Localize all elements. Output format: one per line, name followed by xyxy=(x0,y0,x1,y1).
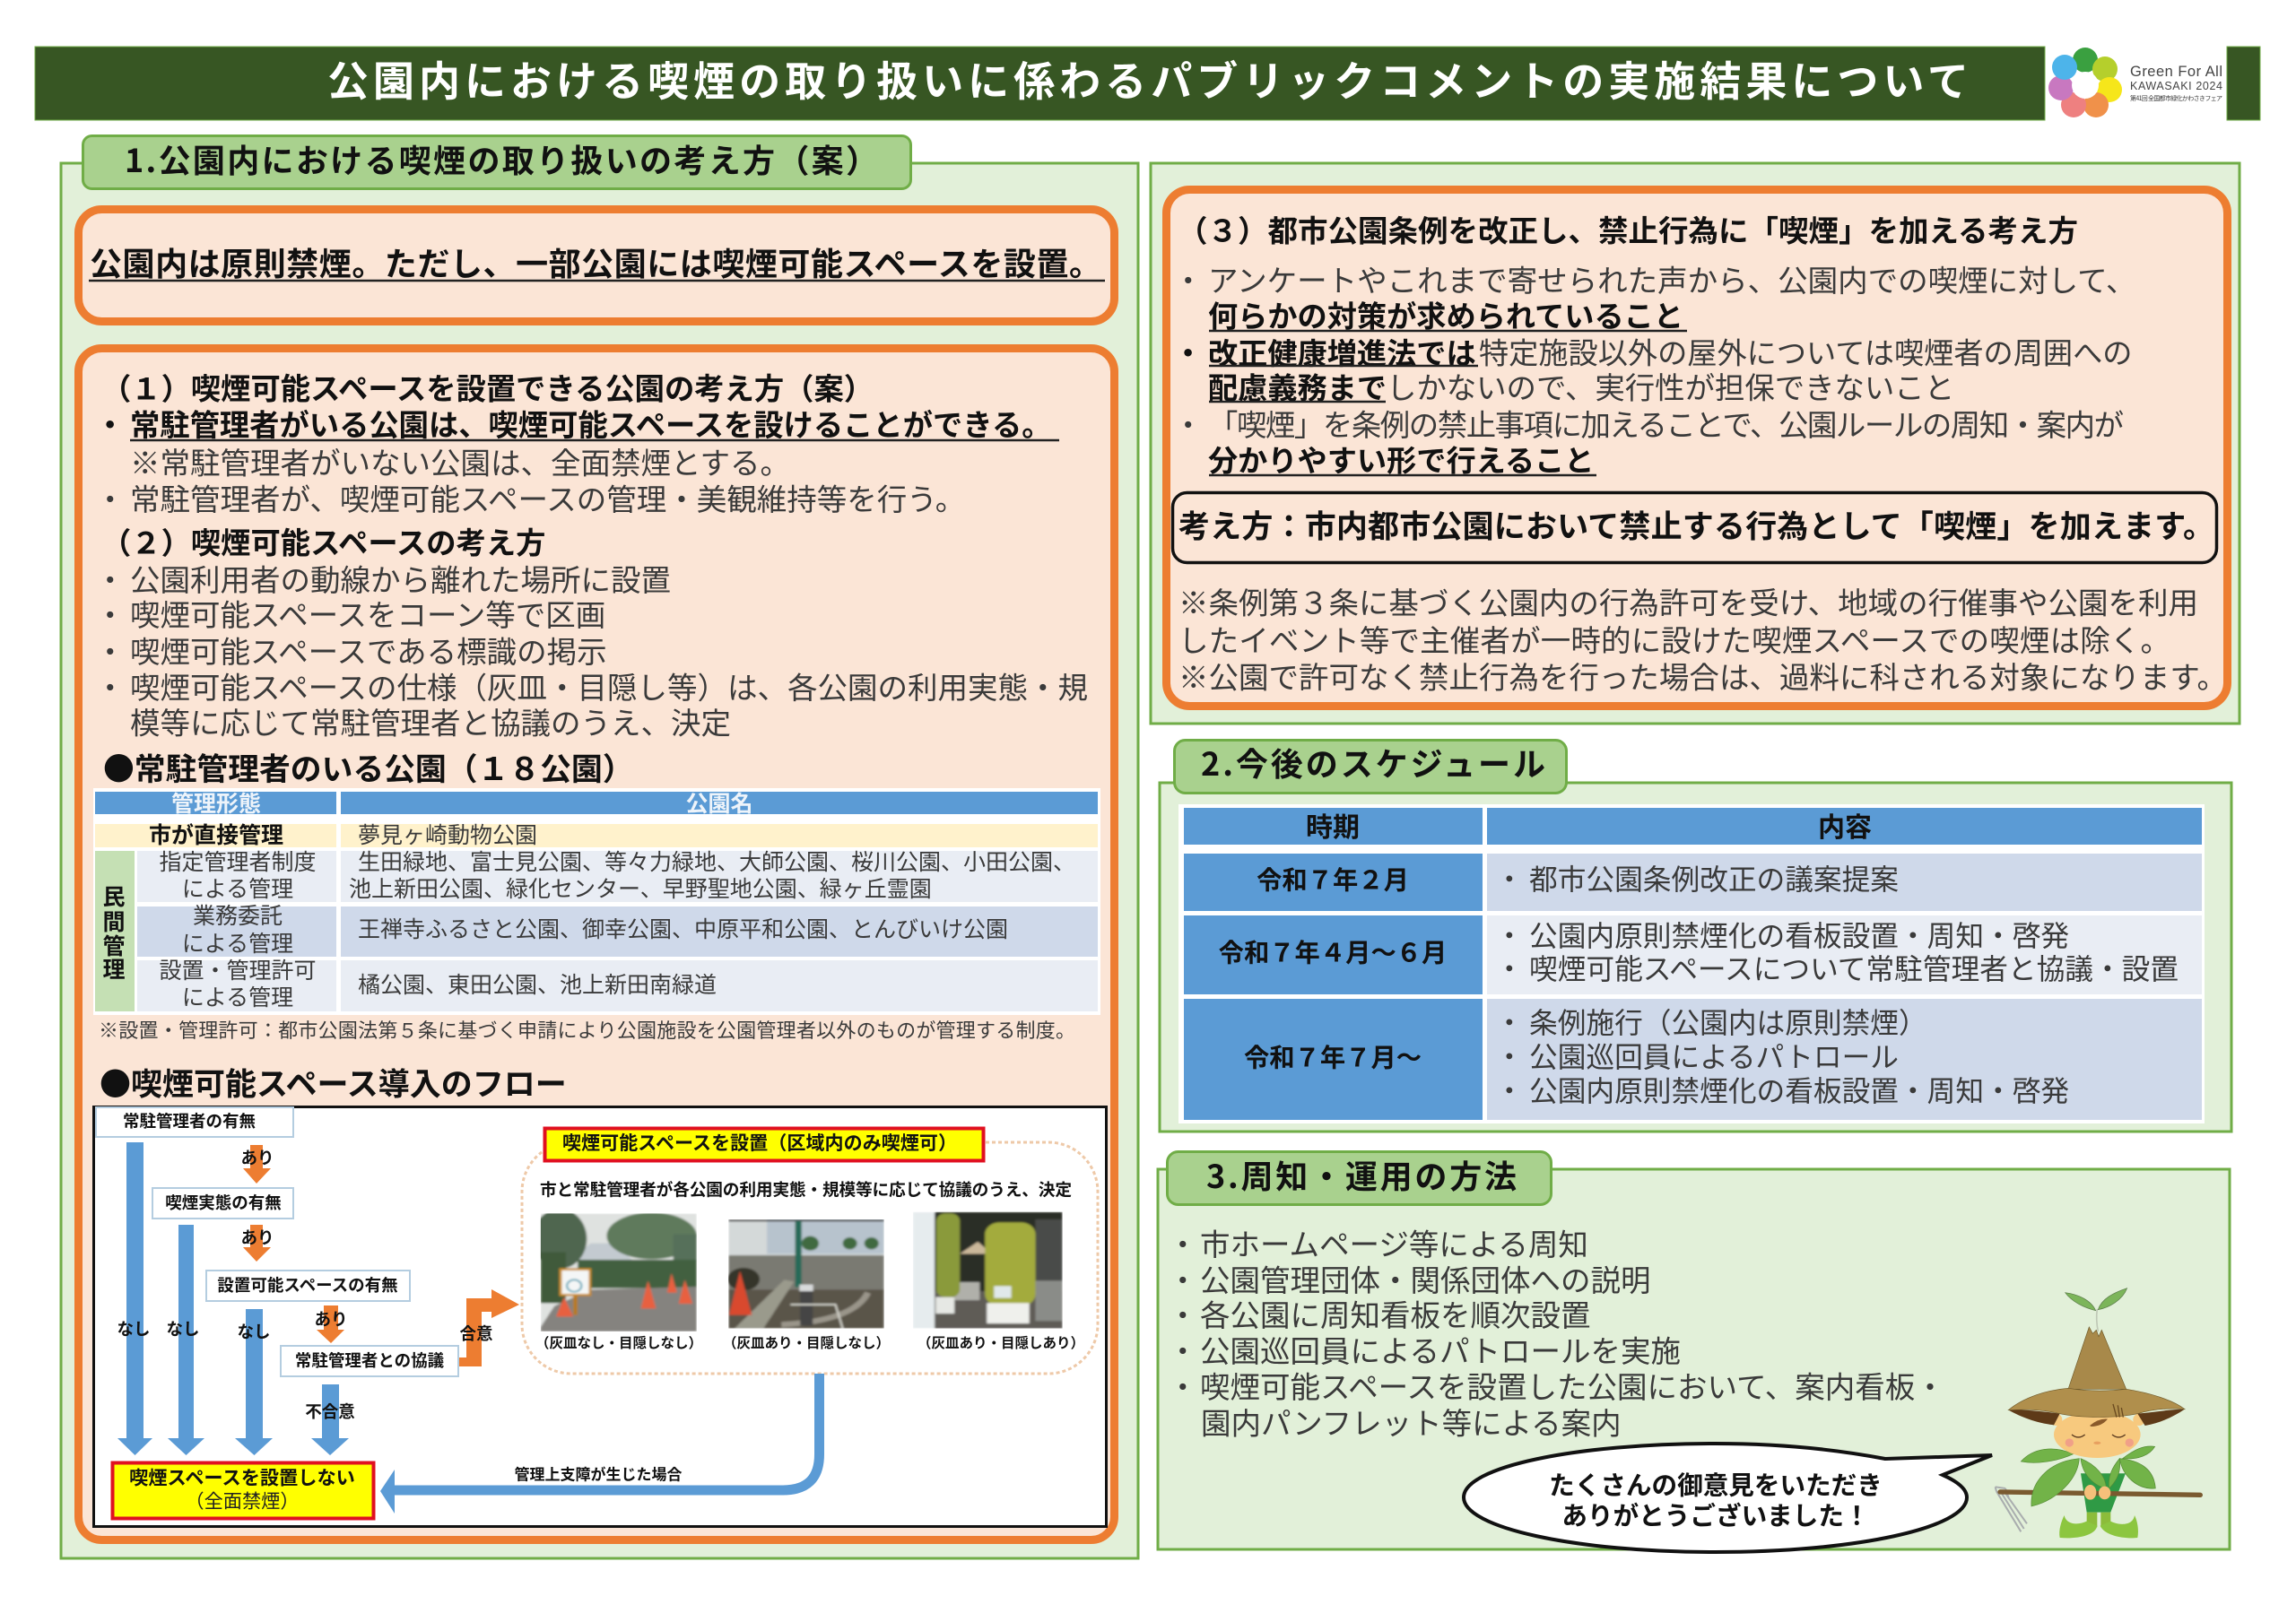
flow steps: 常駐管理者との協議 xyxy=(295,1349,445,1372)
table: parks by management type: 市が直接管理 xyxy=(149,818,283,850)
flow steps: 常駐管理者の有無 xyxy=(123,1109,256,1132)
panel: smoking space policy xyxy=(79,348,1114,1540)
text block: methods: 園内パンフレット等による案内 xyxy=(1201,1399,1622,1444)
schedule table: ・ xyxy=(1495,1069,1524,1110)
heading: parks with resident managers: ●常駐管理者のいる公園（１８公園） xyxy=(103,745,634,790)
text block: policy (2): 喫煙可能スペースである標識の掲示 xyxy=(130,628,607,671)
text block: policy (1): ・ xyxy=(95,400,125,445)
text block: policy (1): （１）喫煙可能スペースを設置できる公園の考え方（案） xyxy=(101,364,874,409)
mascot character xyxy=(1996,1288,2200,1538)
heading: flow: ●喫煙可能スペース導入のフロー xyxy=(100,1060,567,1105)
photo captions xyxy=(535,1332,1084,1352)
blue arrows: none xyxy=(117,1142,349,1455)
rake head xyxy=(1996,1487,2027,1531)
table: parks by management type: 橘公園、東田公園、池上新田南緑道 xyxy=(358,967,717,1000)
hands xyxy=(2084,1485,2110,1500)
rake handle xyxy=(2000,1492,2200,1495)
schedule table xyxy=(1178,804,2205,1123)
logo: Green For All Kawasaki 2024 xyxy=(2048,48,2222,117)
flow labels: 不合意 xyxy=(305,1400,355,1423)
text block: reasons: 改正健康増進法では xyxy=(1208,328,1476,373)
flow labels: なし xyxy=(166,1317,200,1340)
schedule table: 令和７年４月～６月 xyxy=(1219,932,1447,970)
table: parks by management type: 業務委託 xyxy=(193,898,283,931)
photo captions: （灰皿なし・目隠しなし） xyxy=(535,1332,702,1352)
text block: reasons: 何らかの対策が求められていること xyxy=(1208,292,1683,335)
text block: notes: ※条例第３条に基づく公園内の行為許可を受け、地域の行催事や公園を利用 xyxy=(1178,579,2198,622)
flow labels: 管理上支障が生じた場合 xyxy=(515,1462,682,1485)
schedule table: 都市公園条例改正の議案提案 xyxy=(1529,857,1899,898)
schedule table: 公園内原則禁煙化の看板設置・周知・啓発 xyxy=(1529,1069,2069,1110)
table: parks by management type: 池上新田公園、緑化センター、早野聖地公園、緑ヶ丘霊園 xyxy=(349,872,932,904)
callout: stance xyxy=(1173,493,2217,563)
flow labels: なし xyxy=(237,1320,271,1343)
flow chart xyxy=(93,1106,1107,1526)
text block: policy (2): （２）喫煙可能スペースの考え方 xyxy=(101,518,545,563)
flow labels: 合意 xyxy=(459,1322,493,1345)
photo captions: （灰皿あり・目隠しなし） xyxy=(723,1332,890,1352)
flow steps: 喫煙実態の有無 xyxy=(165,1191,282,1214)
hat xyxy=(2008,1327,2185,1426)
speech bubble: たくさんの御意見をいただき xyxy=(1549,1465,1883,1503)
text block: policy (2): ・ xyxy=(95,590,126,635)
text block: policy (2): 喫煙可能スペースの仕様（灰皿・目隠し等）は、各公園の利用実態・規 xyxy=(130,664,1088,707)
table: parks by management type: による管理 xyxy=(182,926,293,958)
section 3 heading tab: 3.周知・運用の方法 xyxy=(1206,1151,1517,1198)
photo captions: （灰皿あり・目隠しあり） xyxy=(918,1332,1084,1352)
schedule table: 条例施行（公園内は原則禁煙） xyxy=(1529,1001,1927,1042)
text block: policy (1): ・ xyxy=(95,475,126,518)
schedule table: 公園巡回員によるパトロール xyxy=(1529,1035,1899,1076)
table: parks by management type: 管理形態 xyxy=(171,786,261,819)
table: parks by management type: 王禅寺ふるさと公園、御幸公園、中原平和公園、とんびいけ公園 xyxy=(358,912,1008,944)
table: parks by management type: 指定管理者制度 xyxy=(159,845,317,877)
text block: reasons: ・ xyxy=(1173,328,1203,373)
dashed group: smoking space options: 喫煙可能スペースを設置（区域内のみ喫煙可） xyxy=(562,1129,957,1156)
text block: reasons xyxy=(1173,256,2135,481)
text block: policy (2): 模等に応じて常駐管理者と協議のうえ、決定 xyxy=(130,699,731,742)
text block: reasons: しかないので、実行性が担保できないこと xyxy=(1387,364,1954,407)
box: no smoking space: 喫煙スペースを設置しない xyxy=(129,1463,355,1490)
table: parks by management type xyxy=(93,786,1100,1015)
speech bubble xyxy=(1464,1444,1992,1552)
arrow: return to no smoking space xyxy=(380,1374,820,1514)
panel: section 1 xyxy=(61,135,1138,1558)
logo: Green For All Kawasaki 2024: 第41回 全国都市緑化かわさきフェア xyxy=(2130,94,2222,103)
text block: policy (1): ※常駐管理者がいない公園は、全面禁煙とする。 xyxy=(130,439,790,482)
table: parks by management type: による管理 xyxy=(182,980,293,1012)
schedule table: 時期 xyxy=(1306,805,1360,845)
orange arrows: yes xyxy=(243,1145,519,1366)
schedule table: 内容 xyxy=(1818,805,1872,845)
text block: notes xyxy=(1178,579,2227,698)
panel: section 2 schedule xyxy=(1160,739,2231,1132)
flow labels xyxy=(117,1146,682,1485)
box: no smoking space xyxy=(113,1463,373,1519)
table: parks by management type: 生田緑地、富士見公園、等々力緑地、大師公園、桜川公園、小田公園、 xyxy=(358,845,1075,877)
schedule table: 令和７年２月 xyxy=(1257,861,1409,897)
text block: methods: 喫煙可能スペースを設置した公園において、案内看板・ xyxy=(1200,1363,1945,1406)
body leaves xyxy=(2021,1446,2155,1506)
text block: methods: ・ xyxy=(1168,1291,1198,1334)
title: 公園内における喫煙の取り扱いに係わるパブリックコメントの実施結果について xyxy=(327,49,1969,108)
section 2 heading tab: 2.今後のスケジュール xyxy=(1201,739,1545,785)
text block: methods xyxy=(1168,1219,1945,1444)
text block: policy (1): 常駐管理者がいる公園は、喫煙可能スペースを設けることができる。 xyxy=(130,400,1052,445)
head xyxy=(2050,1411,2145,1458)
sprout xyxy=(2066,1288,2127,1331)
flow steps: 設置可能スペースの有無 xyxy=(217,1273,398,1297)
schedule table: 令和７年７月～ xyxy=(1244,1038,1422,1074)
table: parks by management type: 設置・管理許可 xyxy=(159,953,317,985)
table: parks by management type: による管理 xyxy=(182,872,293,904)
callout: principle xyxy=(79,210,1114,321)
text block: policy (2): 公園利用者の動線から離れた場所に設置 xyxy=(130,556,671,599)
text block: policy (2) xyxy=(95,518,1088,742)
table: parks by management type: 間 xyxy=(102,905,126,937)
box: no smoking space: （全面禁煙） xyxy=(185,1487,300,1514)
heading: policy (3): （３）都市公園条例を改正し、禁止行為に「喫煙」を加える考え方 xyxy=(1178,206,2078,251)
photo: ashtray and screen xyxy=(913,1212,1063,1329)
text block: policy (2): 喫煙可能スペースをコーン等で区画 xyxy=(130,590,605,635)
callout: principle: 公園内は原則禁煙。ただし、一部公園には喫煙可能スペースを設置。 xyxy=(90,239,1101,285)
text block: notes: したイベント等で主催者が一時的に設けた喫煙スペースでの喫煙は除く。 xyxy=(1178,617,2170,660)
photo: ashtray, no screen xyxy=(727,1218,884,1329)
schedule table: ・ xyxy=(1495,914,1524,955)
text block: reasons: ・ xyxy=(1173,256,1204,299)
panel: section 3 publicity xyxy=(1158,1151,2230,1552)
photo: no ashtray, no screen xyxy=(533,1209,697,1331)
text block: methods: 市ホームページ等による周知 xyxy=(1200,1219,1588,1264)
callout: stance: 考え方：市内都市公園において禁止する行為として「喫煙」を加えます。 xyxy=(1178,502,2214,547)
text block: methods: ・ xyxy=(1168,1219,1198,1264)
text block: methods: ・ xyxy=(1168,1363,1198,1406)
text block: methods: ・ xyxy=(1168,1255,1198,1300)
schedule table: ・ xyxy=(1495,857,1524,898)
logo: Green For All Kawasaki 2024: KAWASAKI 2024 xyxy=(2130,80,2222,92)
table: parks by management type: 民 xyxy=(102,880,126,912)
panel: policy (3) xyxy=(1151,163,2239,724)
flow labels: あり xyxy=(240,1226,274,1249)
table footnote: ※設置・管理許可：都市公園法第５条に基づく申請により公園施設を公園管理者以外のものが管理する制度。 xyxy=(99,1015,1075,1044)
text block: reasons: 配慮義務まで xyxy=(1208,364,1387,407)
text block: policy (2): ・ xyxy=(95,664,126,707)
section 1 heading tab: 1.公園内における喫煙の取り扱いの考え方（案） xyxy=(125,135,878,182)
text block: methods: ・ xyxy=(1168,1327,1198,1370)
text block: policy (2): ・ xyxy=(95,556,126,599)
dashed group: smoking space options: 市と常駐管理者が各公園の利用実態・規模等に応じて協議のうえ、決定 xyxy=(540,1176,1072,1201)
flow labels: あり xyxy=(240,1146,274,1169)
schedule table: ・ xyxy=(1495,947,1524,988)
text block: reasons: 分かりやすい形で行えること xyxy=(1208,436,1594,481)
schedule table: ・ xyxy=(1495,1035,1524,1076)
schedule table: 公園内原則禁煙化の看板設置・周知・啓発 xyxy=(1529,914,2069,955)
dashed group: smoking space options xyxy=(522,1128,1098,1374)
table: parks by management type: 公園名 xyxy=(685,786,753,819)
schedule table: 喫煙可能スペースについて常駐管理者と協議・設置 xyxy=(1529,947,2179,988)
title bar xyxy=(35,47,2260,120)
flow steps xyxy=(96,1107,458,1376)
schedule table: ・ xyxy=(1495,1001,1524,1042)
legs and shoes xyxy=(2059,1473,2138,1538)
text block: policy (2): ・ xyxy=(95,628,126,671)
table: parks by management type: 理 xyxy=(102,952,126,984)
text block: policy (1): 常駐管理者が、喫煙可能スペースの管理・美観維持等を行う。 xyxy=(130,475,965,518)
flow labels: なし xyxy=(117,1317,151,1340)
text block: methods: 公園管理団体・関係団体への説明 xyxy=(1200,1255,1650,1300)
table: parks by management type: 管 xyxy=(102,929,126,961)
text block: methods: 公園巡回員によるパトロールを実施 xyxy=(1200,1327,1681,1370)
text block: notes: ※公園で許可なく禁止行為を行った場合は、過料に科される対象になります。 xyxy=(1178,653,2227,698)
text block: reasons: アンケートやこれまで寄せられた声から、公園内での喫煙に対して、 xyxy=(1208,256,2135,299)
text block: reasons: ・ xyxy=(1173,400,1203,445)
table: parks by management type: 夢見ヶ崎動物公園 xyxy=(358,818,537,850)
flow labels: あり xyxy=(314,1307,348,1331)
logo: Green For All Kawasaki 2024: Green For All xyxy=(2130,64,2222,80)
text block: methods: 各公園に周知看板を順次設置 xyxy=(1200,1291,1591,1334)
text block: policy (1) xyxy=(95,364,1059,518)
text block: reasons: 特定施設以外の屋外については喫煙者の周囲への xyxy=(1479,328,2132,373)
text block: reasons: 「喫煙」を条例の禁止事項に加えることで、公園ルールの周知・案内が xyxy=(1208,400,2124,445)
speech bubble: ありがとうございました！ xyxy=(1561,1496,1870,1533)
